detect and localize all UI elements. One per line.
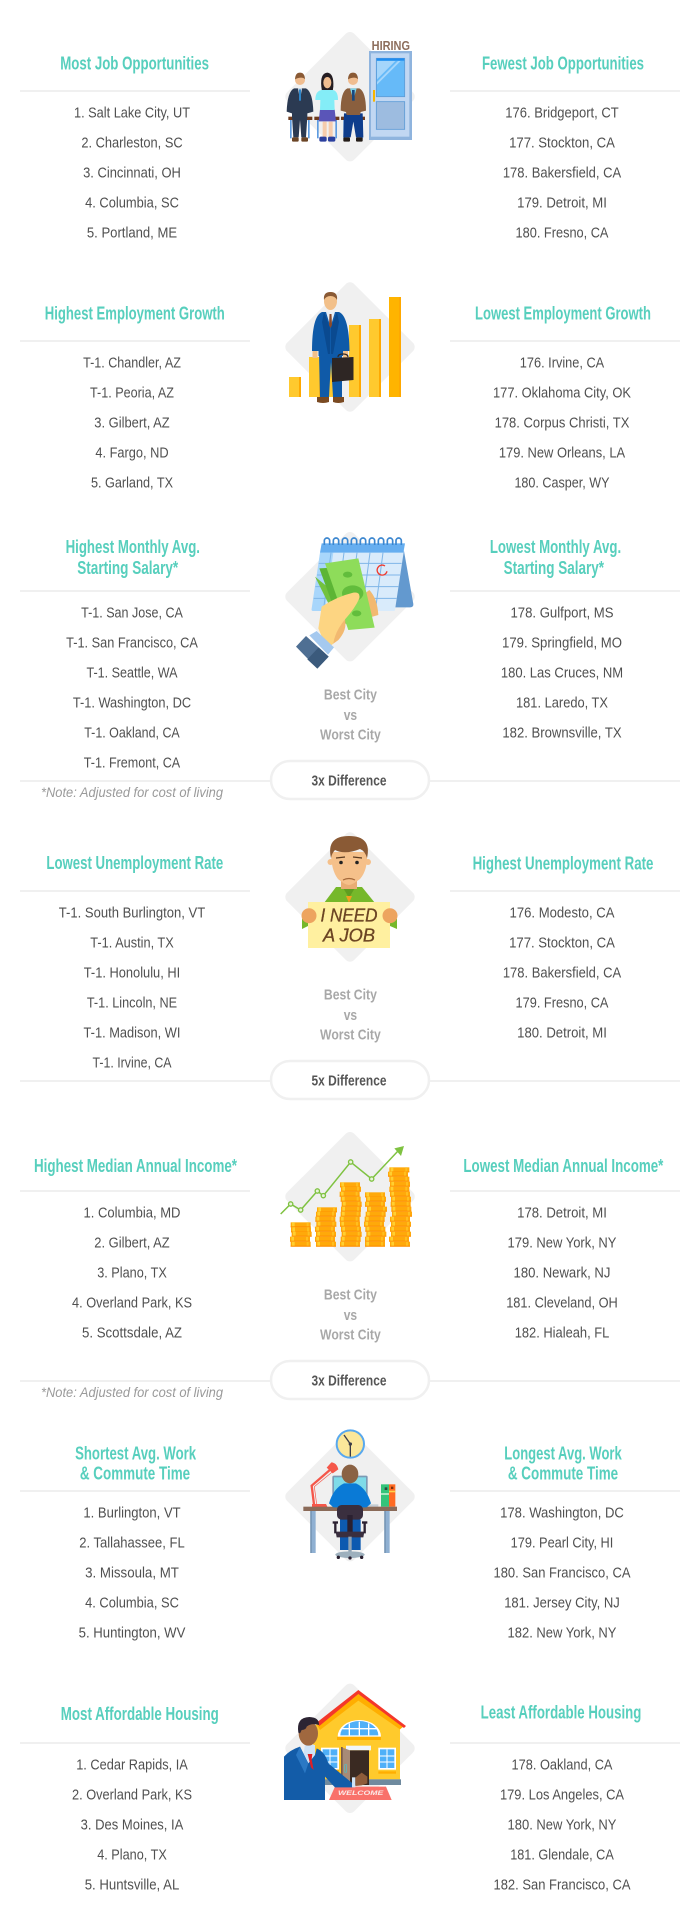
- list: lowest median annual income: 180. Newark, NJ: [514, 1265, 610, 1282]
- list: highest median annual income: 2. Gilbert, AZ: [94, 1235, 170, 1252]
- note: adjusted for cost of living: *Note: Adjusted for cost of living: [41, 1384, 223, 1400]
- coin stacks: [290, 1167, 412, 1247]
- section: starting salary: [20, 529, 680, 800]
- heading: most affordable housing: Most Affordable Housing: [61, 1704, 219, 1724]
- heading: lowest monthly avg. starting salary: Starting Salary*: [504, 558, 604, 578]
- list: lowest starting salary: 180. Las Cruces, NM: [501, 665, 623, 682]
- list: highest unemployment rate: 180. Detroit, MI: [517, 1025, 607, 1042]
- list: highest median annual income: [72, 1205, 192, 1342]
- businessman: [312, 292, 350, 403]
- list: highest employment growth: T-1. Peoria, AZ: [90, 385, 174, 402]
- list: fewest job opportunities: 177. Stockton, CA: [509, 135, 615, 152]
- list: shortest work and commute time: 3. Missoula, MT: [85, 1565, 179, 1582]
- list: highest employment growth: 4. Fargo, ND: [95, 445, 169, 462]
- list: least affordable housing: 180. New York, NY: [508, 1817, 616, 1834]
- list: highest employment growth: T-1. Chandler, AZ: [83, 355, 181, 372]
- section: job opportunities: [20, 29, 680, 242]
- list: most job opportunities: 5. Portland, ME: [87, 225, 177, 242]
- list: most job opportunities: 4. Columbia, SC: [85, 195, 179, 212]
- list: highest starting salary: [66, 605, 198, 772]
- list: highest unemployment rate: 176. Modesto, CA: [510, 905, 614, 922]
- icon: coin stacks with rising trend line: [281, 1129, 417, 1264]
- sign: [302, 902, 398, 948]
- house: [313, 1690, 406, 1785]
- list: shortest work and commute time: 5. Huntington, WV: [79, 1625, 185, 1642]
- list: lowest starting salary: 181. Laredo, TX: [516, 695, 608, 712]
- list: least affordable housing: 182. San Francisco, CA: [494, 1877, 630, 1894]
- heading: lowest unemployment rate: Lowest Unemployment Rate: [46, 853, 223, 873]
- job seeker figure: [302, 836, 397, 929]
- comparison label: best city vs worst city: vs: [344, 1307, 357, 1324]
- list: longest work and commute time: 178. Washington, DC: [500, 1505, 624, 1522]
- heading: longest avg. work and commute time: Longest Avg. Work: [504, 1444, 622, 1464]
- list: lowest starting salary: 179. Springfield, MO: [502, 635, 622, 652]
- cash and hand: [315, 558, 378, 648]
- heading: shortest avg. work and commute time: & Commute Time: [80, 1464, 190, 1484]
- heading: highest monthly avg. starting salary: Highest Monthly Avg.: [66, 537, 200, 557]
- bar chart: [289, 297, 401, 397]
- seated worker and chair: [329, 1465, 371, 1560]
- list: most job opportunities: 3. Cincinnati, OH: [83, 165, 181, 182]
- list: most affordable housing: [72, 1757, 192, 1894]
- list: lowest employment growth: [493, 355, 631, 492]
- list: most affordable housing: 4. Plano, TX: [97, 1847, 167, 1864]
- list: highest employment growth: [83, 355, 181, 492]
- callout: 5x difference: [271, 1061, 429, 1099]
- binders: [381, 1484, 395, 1507]
- man in navy suit: [287, 73, 313, 142]
- list: most job opportunities: [74, 105, 190, 242]
- heading: shortest avg. work and commute time: Shortest Avg. Work: [75, 1444, 197, 1464]
- list: lowest unemployment rate: T-1. Austin, TX: [90, 935, 174, 952]
- list: lowest starting salary: [501, 605, 623, 742]
- section: median annual income: [20, 1129, 680, 1400]
- icon: businessman with rising bar chart: [283, 280, 417, 414]
- list: lowest employment growth: 178. Corpus Christi, TX: [495, 415, 629, 432]
- callout: 3x difference: 3x Difference: [312, 1372, 386, 1390]
- sign: I NEED: [320, 906, 378, 926]
- icon: realtor welcoming at house: [283, 1681, 417, 1816]
- callout: 3x difference: 3x Difference: [312, 772, 386, 790]
- list: lowest employment growth: 179. New Orleans, LA: [499, 445, 625, 462]
- list: least affordable housing: 179. Los Angeles, CA: [500, 1787, 624, 1804]
- door: [369, 51, 412, 140]
- list: longest work and commute time: 179. Pearl City, HI: [511, 1535, 613, 1552]
- list: lowest median annual income: 182. Hialeah, FL: [515, 1325, 609, 1342]
- heading: fewest job opportunities: Fewest Job Opportunities: [482, 54, 644, 74]
- list: lowest unemployment rate: T-1. Honolulu, HI: [84, 965, 180, 982]
- list: highest median annual income: 5. Scottsdale, AZ: [82, 1325, 182, 1342]
- list: longest work and commute time: 181. Jersey City, NJ: [504, 1595, 620, 1612]
- list: lowest median annual income: [506, 1205, 618, 1342]
- desk lamp: [312, 1462, 338, 1507]
- heading: least affordable housing: Least Affordable Housing: [481, 1702, 641, 1722]
- list: highest unemployment rate: 179. Fresno, CA: [516, 995, 608, 1012]
- list: most job opportunities: 2. Charleston, SC: [81, 135, 183, 152]
- list: lowest starting salary: 178. Gulfport, MS: [510, 605, 614, 622]
- list: longest work and commute time: 182. New York, NY: [508, 1625, 616, 1642]
- comparison label: best city vs worst city: vs: [344, 707, 357, 724]
- list: highest unemployment rate: 177. Stockton, CA: [509, 935, 615, 952]
- desk: [303, 1507, 397, 1553]
- list: shortest work and commute time: [79, 1505, 185, 1642]
- callout: 3x difference: [271, 761, 429, 799]
- section: unemployment rate: [20, 830, 680, 1099]
- section: work and commute time: [20, 1429, 680, 1642]
- list: lowest median annual income: 179. New York, NY: [508, 1235, 616, 1252]
- list: longest work and commute time: [494, 1505, 630, 1642]
- list: lowest starting salary: 182. Brownsville, TX: [502, 725, 622, 742]
- comparison label: best city vs worst city: [320, 1286, 381, 1344]
- list: highest starting salary: T-1. San Francisco, CA: [66, 635, 198, 652]
- monitor: [332, 1476, 378, 1507]
- calendar: [312, 538, 413, 611]
- list: most job opportunities: 1. Salt Lake City, UT: [74, 105, 190, 122]
- heading: highest monthly avg. starting salary: Starting Salary*: [77, 558, 178, 578]
- comparison label: best city vs worst city: Worst City: [320, 1026, 381, 1044]
- list: lowest median annual income: 178. Detroit, MI: [517, 1205, 607, 1222]
- realtor: [284, 1717, 367, 1800]
- list: most affordable housing: 5. Huntsville, AL: [85, 1877, 179, 1894]
- comparison label: best city vs worst city: vs: [344, 1007, 357, 1024]
- list: highest starting salary: T-1. Seattle, WA: [86, 665, 178, 682]
- section: affordable housing: [20, 1681, 680, 1894]
- list: fewest job opportunities: 180. Fresno, CA: [516, 225, 608, 242]
- list: highest unemployment rate: 178. Bakersfield, CA: [503, 965, 621, 982]
- comparison label: best city vs worst city: Best City: [324, 686, 377, 704]
- comparison label: best city vs worst city: Worst City: [320, 1326, 381, 1344]
- list: shortest work and commute time: 4. Columbia, SC: [85, 1595, 179, 1612]
- comparison label: best city vs worst city: [320, 986, 381, 1044]
- list: lowest unemployment rate: T-1. Irvine, CA: [92, 1055, 172, 1072]
- heading: highest median annual income: Highest Median Annual Income*: [34, 1156, 237, 1176]
- icon: person working at desk under clock: [283, 1429, 417, 1564]
- list: lowest unemployment rate: [59, 905, 205, 1072]
- list: fewest job opportunities: 179. Detroit, MI: [517, 195, 607, 212]
- comparison label: best city vs worst city: [320, 686, 381, 744]
- list: highest median annual income: 4. Overland Park, KS: [72, 1295, 192, 1312]
- list: longest work and commute time: 180. San Francisco, CA: [494, 1565, 630, 1582]
- list: fewest job opportunities: 178. Bakersfield, CA: [503, 165, 621, 182]
- heading: longest avg. work and commute time: & Commute Time: [508, 1464, 618, 1484]
- list: shortest work and commute time: 2. Tallahassee, FL: [79, 1535, 185, 1552]
- list: highest median annual income: 1. Columbia, MD: [84, 1205, 181, 1222]
- list: most affordable housing: 1. Cedar Rapids, IA: [76, 1757, 188, 1774]
- man in brown jacket: [341, 73, 366, 142]
- briefcase: [332, 354, 354, 382]
- list: highest starting salary: T-1. San Jose, CA: [81, 605, 183, 622]
- list: least affordable housing: 181. Glendale, CA: [510, 1847, 614, 1864]
- list: lowest unemployment rate: T-1. Lincoln, NE: [87, 995, 177, 1012]
- callout: 5x difference: 5x Difference: [312, 1072, 386, 1090]
- icon: man holding i need a job sign: [283, 830, 417, 964]
- door sign: hiring: HIRING: [372, 38, 410, 53]
- list: least affordable housing: [494, 1757, 630, 1894]
- list: highest starting salary: T-1. Washington, DC: [73, 695, 191, 712]
- list: least affordable housing: 178. Oakland, CA: [512, 1757, 612, 1774]
- sign: A JOB: [322, 926, 375, 946]
- list: highest employment growth: 5. Garland, TX: [91, 475, 173, 492]
- list: lowest unemployment rate: T-1. Madison, WI: [84, 1025, 180, 1042]
- list: highest unemployment rate: [503, 905, 621, 1042]
- list: fewest job opportunities: 176. Bridgeport, CT: [505, 105, 619, 122]
- shirt cuff and sleeve: [296, 631, 334, 669]
- list: most affordable housing: 2. Overland Park, KS: [72, 1787, 192, 1804]
- list: highest median annual income: 3. Plano, TX: [97, 1265, 167, 1282]
- comparison label: best city vs worst city: Worst City: [320, 726, 381, 744]
- icon: hand holding cash over calendar: [283, 529, 417, 669]
- list: lowest employment growth: 180. Casper, WY: [514, 475, 610, 492]
- heading: highest employment growth: Highest Employment Growth: [45, 304, 225, 324]
- callout: 3x difference: [271, 1361, 429, 1399]
- wall clock: [337, 1430, 364, 1458]
- list: lowest employment growth: 176. Irvine, CA: [520, 355, 604, 372]
- list: most affordable housing: 3. Des Moines, IA: [81, 1817, 183, 1834]
- welcome mat: WELCOME: [338, 1790, 384, 1797]
- section: employment growth: [20, 280, 680, 492]
- comparison label: best city vs worst city: Best City: [324, 1286, 377, 1304]
- list: lowest employment growth: 177. Oklahoma City, OK: [493, 385, 631, 402]
- comparison label: best city vs worst city: Best City: [324, 986, 377, 1004]
- list: highest starting salary: T-1. Oakland, CA: [84, 725, 180, 742]
- list: highest starting salary: T-1. Fremont, CA: [84, 755, 180, 772]
- woman in cyan top: [314, 73, 339, 142]
- icon: job candidates waiting by hiring door: [283, 29, 417, 164]
- list: shortest work and commute time: 1. Burlington, VT: [83, 1505, 181, 1522]
- list: lowest median annual income: 181. Cleveland, OH: [506, 1295, 618, 1312]
- heading: most job opportunities: Most Job Opportunities: [60, 54, 209, 74]
- heading: lowest monthly avg. starting salary: Lowest Monthly Avg.: [490, 537, 621, 557]
- list: lowest unemployment rate: T-1. South Burlington, VT: [59, 905, 205, 922]
- note: adjusted for cost of living: *Note: Adjusted for cost of living: [41, 784, 223, 800]
- list: fewest job opportunities: [503, 105, 621, 242]
- trend line arrow: [281, 1146, 404, 1214]
- list: highest employment growth: 3. Gilbert, AZ: [94, 415, 170, 432]
